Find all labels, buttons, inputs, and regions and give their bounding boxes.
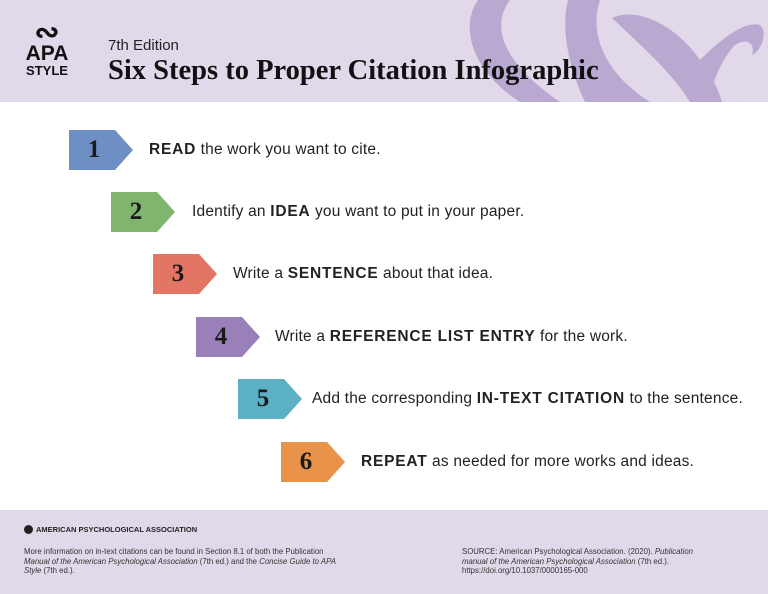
step 3: 3 [172,260,184,287]
logo: APA Style [26,16,68,78]
step 4: 4 [215,323,227,350]
step 4: Write a REFERENCE LIST ENTRY for the work. [275,328,628,345]
title: Six Steps to Proper Citation Infographic [108,55,599,86]
logo: APA Style: ∾ [34,16,60,49]
source: SOURCE: American Psychological Association. (2020). Publication manual of the American Psychological Association (7th ed.). https://doi.org/10.1037/0000165-000 [462,547,693,575]
step 3: Write a SENTENCE about that idea. [233,265,493,282]
logo: APA Style: APA [26,42,68,65]
step 5 [238,379,743,419]
header band [0,0,768,102]
step 6: REPEAT as needed for more works and ideas. [361,453,694,470]
logo: APA Style: STYLE [26,63,68,78]
step 6: 6 [300,448,312,475]
step 2: Identify an IDEA you want to put in your paper. [192,203,524,220]
step 4 [196,317,628,357]
step 1: 1 [88,136,100,163]
step 6 [281,442,694,482]
step 2: 2 [130,198,142,225]
footer band [0,510,768,594]
APA association logo: AMERICAN PSYCHOLOGICAL ASSOCIATION [36,525,197,534]
edition: 7th Edition [108,37,179,54]
step 1 [69,130,381,170]
step 3 [153,254,493,294]
step 1: READ the work you want to cite. [149,141,381,158]
step 5: Add the corresponding IN-TEXT CITATION to the sentence. [312,390,743,407]
decorative swirl [470,0,764,102]
step 2 [111,192,524,232]
footer note: More information on in-text citations can be found in Section 8.1 of both the Publication Manual of the American Psychological Association (7th ed.) and the Concise Guide to APA Style (7th ed.). [24,547,336,575]
step 5: 5 [257,385,269,412]
